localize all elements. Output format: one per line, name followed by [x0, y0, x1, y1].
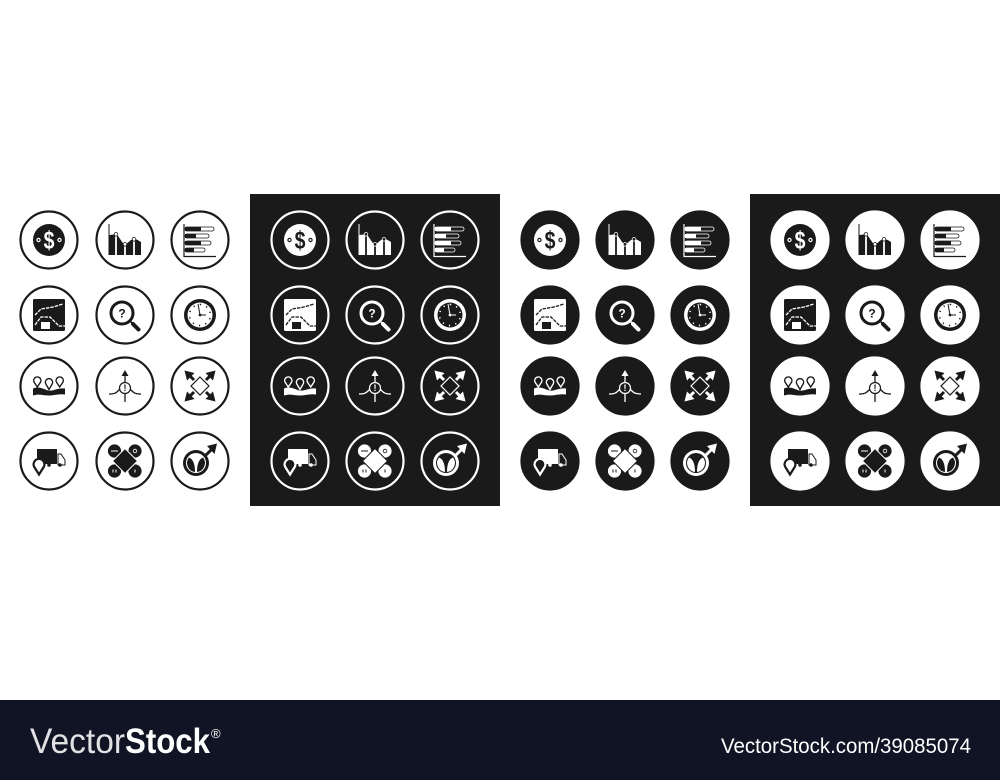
- icon: clock: [672, 286, 728, 344]
- icon: magnifier with question mark: ?: [618, 306, 626, 320]
- icon: diamond with arrows: [172, 358, 228, 414]
- icon: pie chart with arrow: [672, 432, 728, 490]
- icon: magnifier with question mark: [96, 286, 154, 344]
- icon: dollar coin: $: [545, 226, 556, 254]
- logo: VectorStock: ®: [211, 726, 221, 741]
- icon: delivery truck with pin: [272, 432, 328, 490]
- panel: filled black icons on white: [500, 194, 750, 506]
- icon: road fork with warning: !: [624, 383, 626, 393]
- icon: magnifier with question mark: [346, 286, 404, 344]
- icon: line chart board: [522, 286, 578, 344]
- logo: VectorStock: Stock: [125, 722, 210, 761]
- icon: diamond with arrows: [922, 358, 978, 414]
- icon: dollar coin: [272, 212, 328, 268]
- icon: delivery truck with pin: [522, 432, 578, 490]
- icon: bar chart: [172, 212, 228, 268]
- icon: pie chart with arrow: [172, 432, 228, 490]
- icon: area chart: [596, 212, 654, 268]
- icon: line chart board: [772, 286, 828, 344]
- icon: dollar coin: [20, 212, 78, 268]
- icon: clock: [922, 286, 978, 344]
- footer bar: [0, 700, 1000, 780]
- panel: outlined icons on white: [0, 194, 250, 506]
- panel: outlined icons on black: [250, 194, 500, 506]
- icon: diamond with arrows: [422, 358, 478, 414]
- image id text: VectorStock.com/39085074: [721, 735, 971, 758]
- icon: dollar coin: [772, 212, 828, 268]
- icon: road fork with warning: !: [374, 383, 376, 393]
- icon: bar chart: [672, 212, 728, 268]
- icon: clock: [422, 286, 478, 344]
- icon: dollar coin: $: [44, 226, 55, 254]
- icon: road fork with warning: [346, 358, 404, 414]
- panel: filled white icons on black: [750, 194, 1000, 506]
- icon: pie chart with arrow: [922, 432, 978, 490]
- icon: road fork with warning: !: [124, 383, 126, 393]
- icon: four node diagram: [346, 432, 404, 490]
- icon: pie chart with arrow: [422, 432, 478, 490]
- icon: four node diagram: [596, 432, 654, 490]
- icon: map pins: [522, 358, 578, 414]
- icon: bar chart: [922, 212, 978, 268]
- icon: area chart: [346, 212, 404, 268]
- icon: road fork with warning: [96, 358, 154, 414]
- icon: dollar coin: $: [795, 226, 806, 254]
- icon: bar chart: [422, 212, 478, 268]
- icon: magnifier with question mark: ?: [368, 306, 376, 320]
- icon: magnifier with question mark: ?: [118, 306, 126, 320]
- logo: VectorStock: Vector: [30, 722, 125, 761]
- icon: line chart board: [272, 286, 328, 344]
- icon: four node diagram: [846, 432, 904, 490]
- icon: dollar coin: $: [295, 226, 306, 254]
- icon: magnifier with question mark: ?: [868, 306, 876, 320]
- icon: clock: [172, 286, 228, 344]
- logo: VectorStock: [30, 722, 221, 761]
- icon: map pins: [272, 358, 328, 414]
- icon: magnifier with question mark: [846, 286, 904, 344]
- icon: road fork with warning: !: [874, 383, 876, 393]
- icon: delivery truck with pin: [772, 432, 828, 490]
- icon: magnifier with question mark: [596, 286, 654, 344]
- icon: line chart board: [20, 286, 78, 344]
- icon: road fork with warning: [846, 358, 904, 414]
- icon: four node diagram: [96, 432, 154, 490]
- icon: delivery truck with pin: [20, 432, 78, 490]
- icon: road fork with warning: [596, 358, 654, 414]
- icon: area chart: [846, 212, 904, 268]
- icon: map pins: [772, 358, 828, 414]
- icon: area chart: [96, 212, 154, 268]
- icon: diamond with arrows: [672, 358, 728, 414]
- icon: map pins: [20, 358, 78, 414]
- icon: dollar coin: [522, 212, 578, 268]
